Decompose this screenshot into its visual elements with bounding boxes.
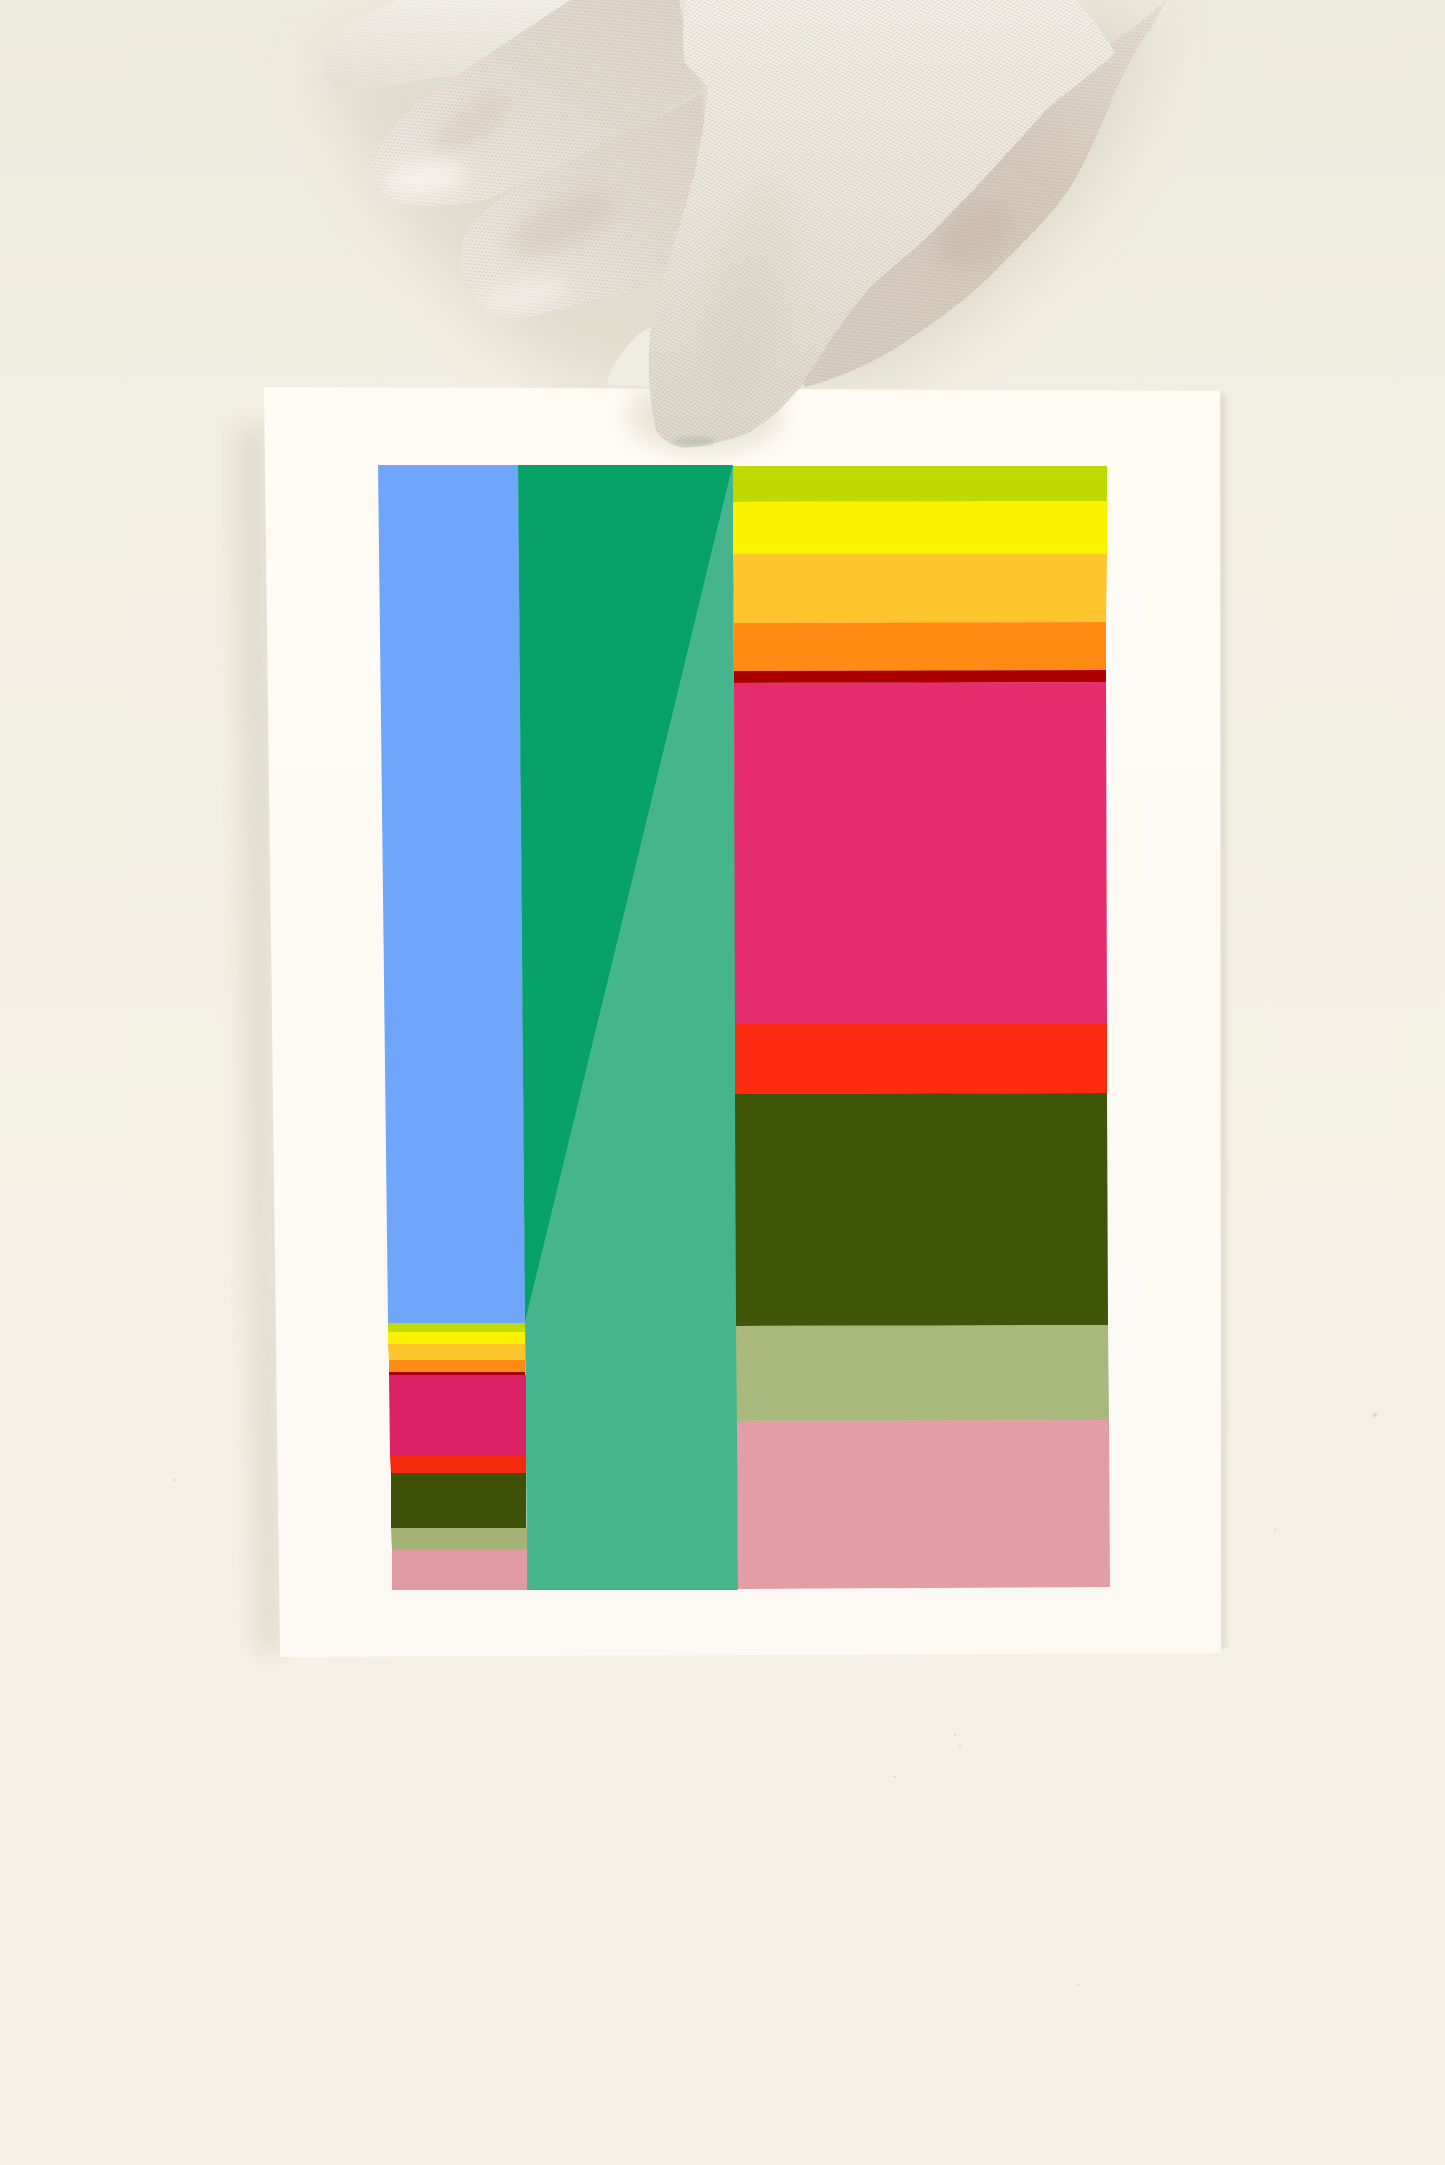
second finger <box>372 0 702 205</box>
sheer shading <box>686 174 814 406</box>
fingertip highlight <box>479 273 571 317</box>
sheer patch <box>925 188 1025 282</box>
colour-block artwork <box>378 465 1110 1590</box>
white knitted glove <box>323 0 1166 447</box>
greenish fingertip tint <box>675 436 715 446</box>
back finger <box>780 0 1166 387</box>
left stripe stack <box>388 1323 527 1590</box>
dark green triangle <box>518 465 733 1323</box>
shadow of paper on wall <box>236 395 1227 1652</box>
sheer patch <box>498 181 622 269</box>
blue column <box>378 465 525 1323</box>
third finger <box>461 93 710 318</box>
index finger <box>649 0 1115 447</box>
top finger <box>323 0 600 90</box>
sheer patch <box>422 84 518 166</box>
right stripe stack <box>733 466 1110 1589</box>
fingertip highlight <box>381 154 469 202</box>
shadow of fingertip on paper <box>627 377 783 453</box>
shadow of hand on wall <box>320 1 1151 385</box>
paper sheet <box>264 387 1221 1657</box>
teal column <box>525 465 738 1590</box>
small finger fold behind index <box>607 325 660 387</box>
wall specks <box>174 1413 1377 1986</box>
